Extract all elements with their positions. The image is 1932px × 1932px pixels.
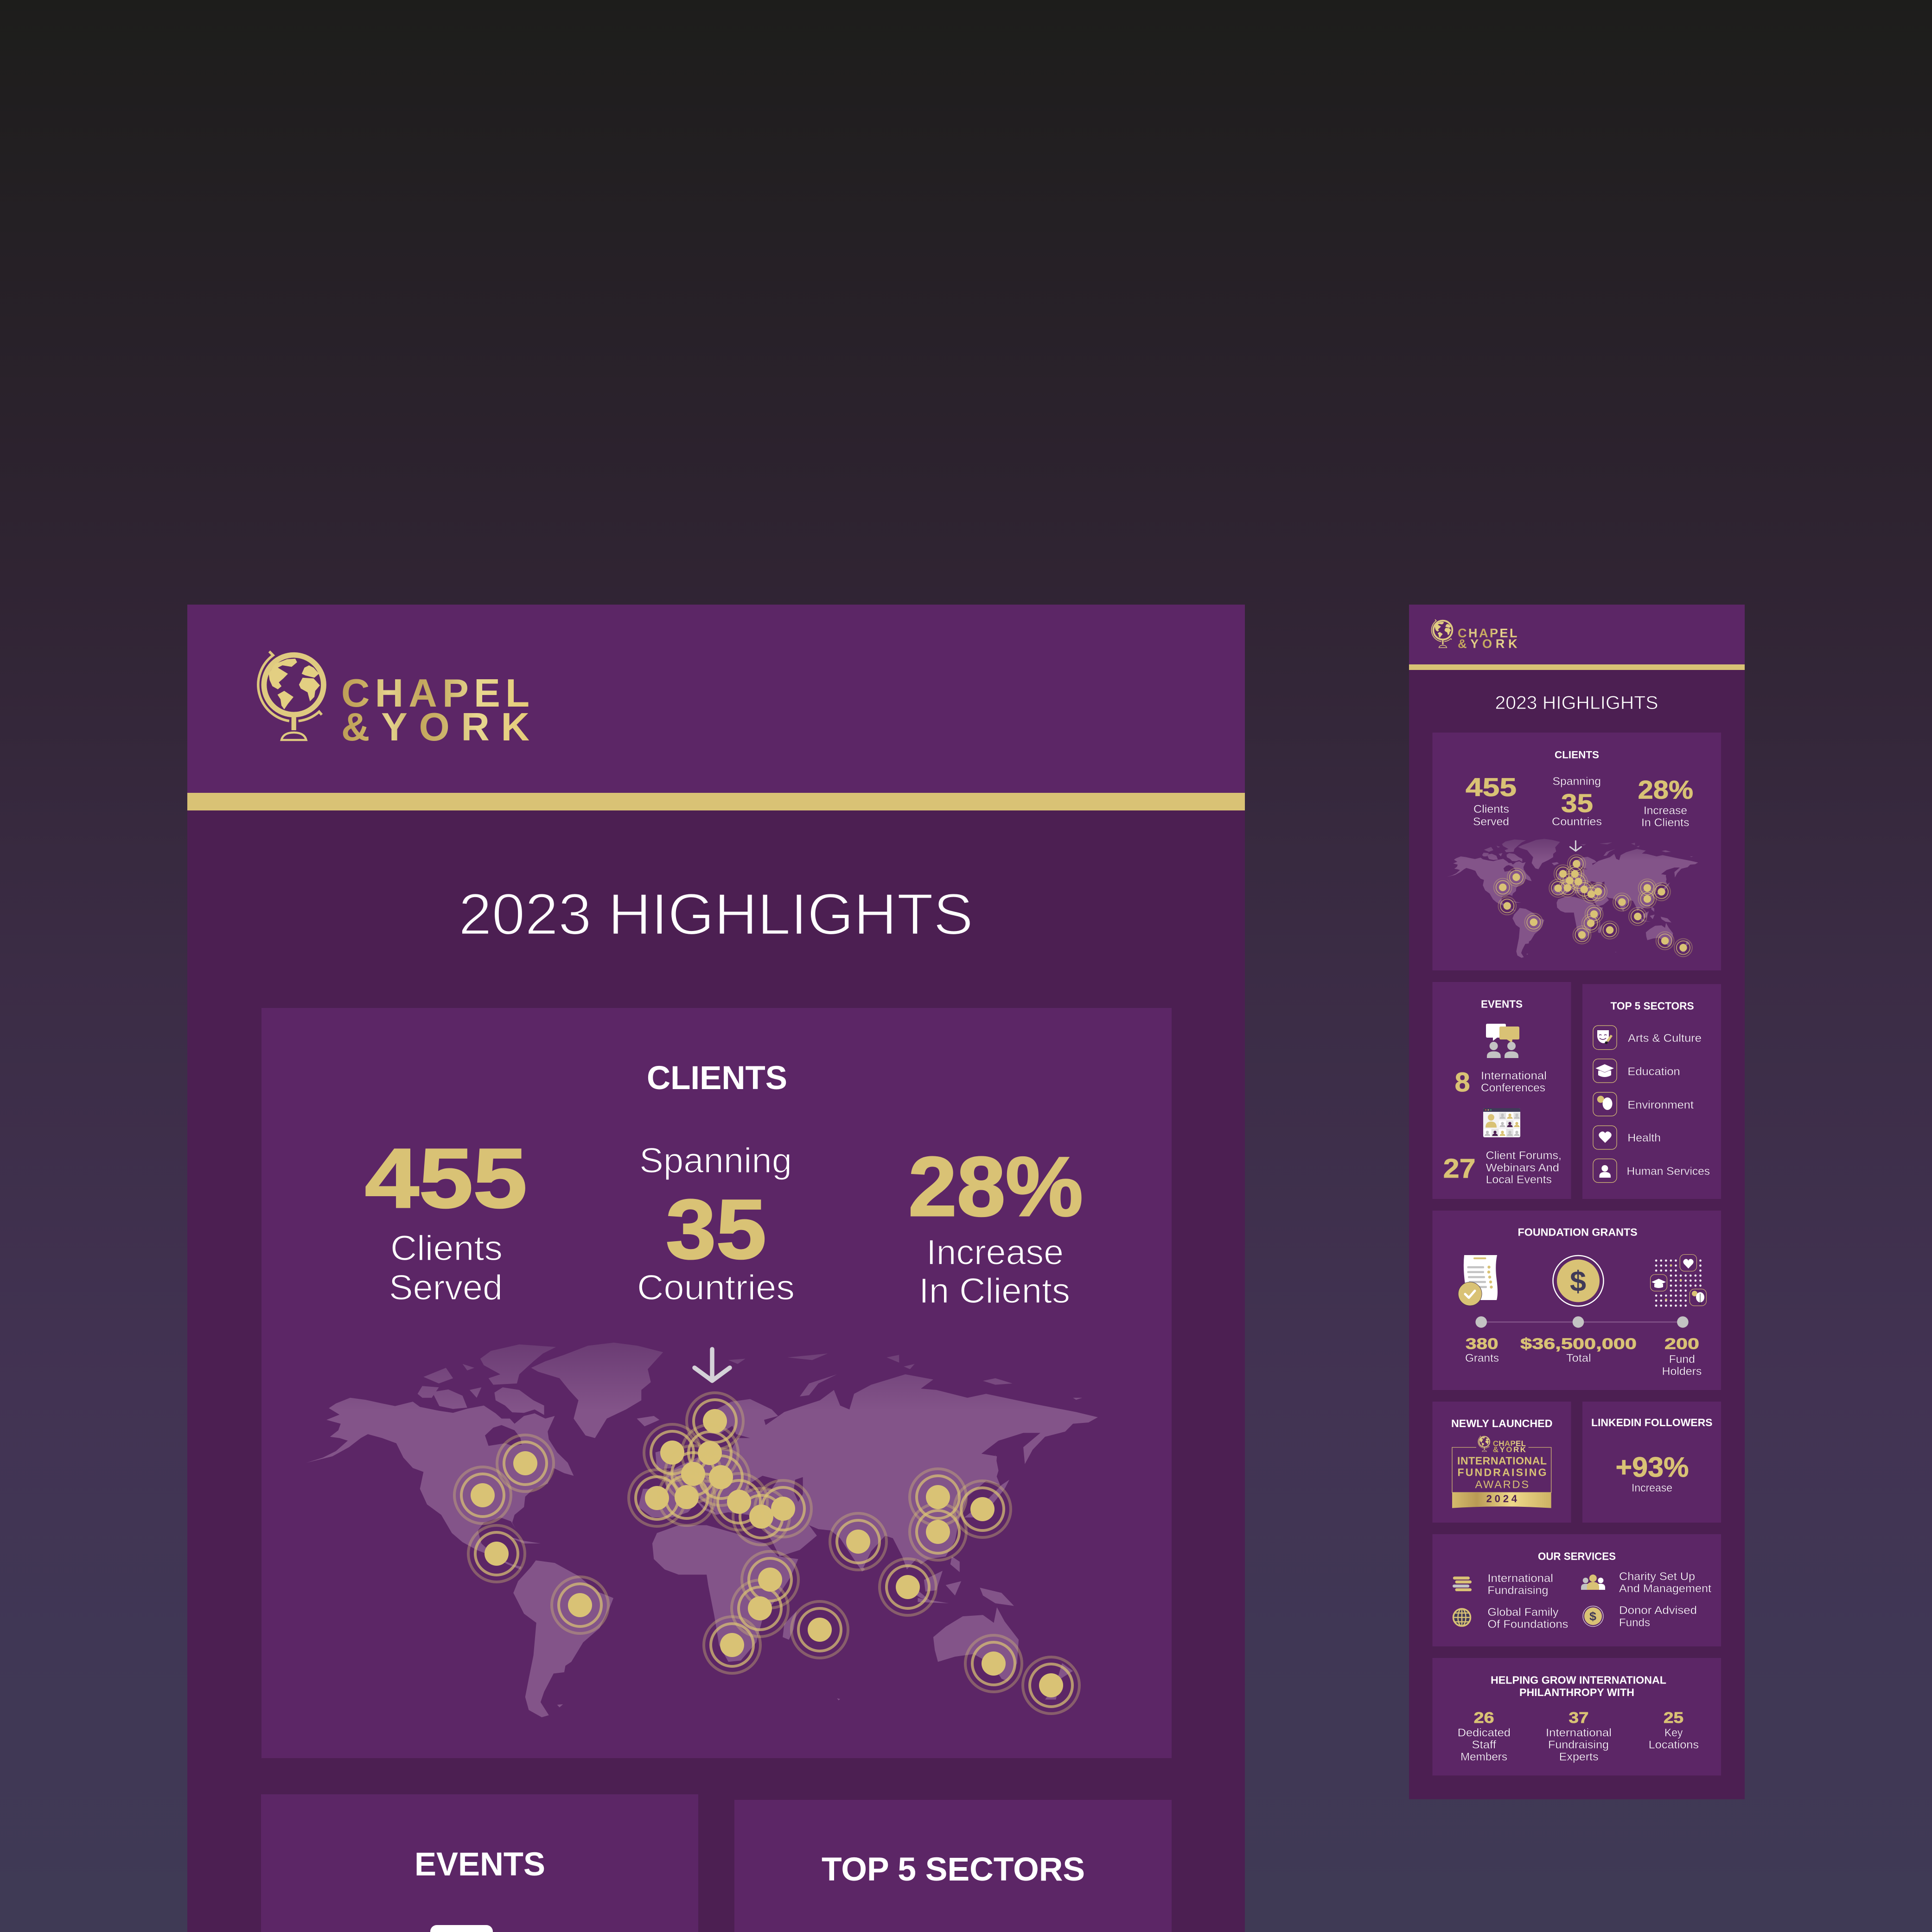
award badge [1452,1436,1551,1508]
stat: 37 experts [1546,1709,1612,1763]
world map with client locations [306,1343,1098,1717]
stat: 200 fund holders: 200 [1664,1335,1699,1352]
award badge: CHAPEL [1493,1439,1526,1448]
stat: 455 clients served: Clients [390,1229,503,1268]
stat 455 small: 455 [1466,772,1517,802]
stat: 26 staff: Dedicated [1458,1727,1511,1739]
small header band [1409,605,1745,664]
icon: conference speech bubbles and people [1486,1024,1519,1058]
stat 28% small [1638,775,1693,829]
stat: total amount: $36,500,000 [1520,1335,1637,1352]
map land: the Americas and Greenland [306,1343,663,1717]
header band [187,605,1245,793]
service: global family of foundations: Of Foundations [1487,1618,1568,1631]
panel: events small [1433,982,1571,1199]
stat: 28% increase in clients [908,1139,1083,1311]
events heading: EVENTS [414,1846,545,1883]
award badge: INTERNATIONAL [1457,1454,1547,1467]
service: global family of foundations [1453,1606,1568,1631]
service: charity set up and management: And Management [1619,1582,1711,1595]
panel: newly launched [1433,1402,1571,1523]
stat: 25 locations [1649,1709,1699,1751]
logo: Chapel & York: CHAPEL [341,671,529,715]
stat 35 small: 35 [1561,788,1593,818]
map land: Eurasia, Africa and Oceania [637,1353,1098,1700]
icon: speech bubble top [430,1925,493,1932]
stat: 37 experts: International [1546,1727,1612,1739]
philanthropy heading [1491,1674,1666,1698]
stat: 27 client forums: Local Events [1486,1173,1552,1186]
sector: education [1593,1059,1680,1083]
logo: Chapel & York: &YORK [341,705,529,749]
stat: 26 staff [1458,1709,1511,1763]
service: donor advised funds: Donor Advised [1619,1604,1697,1617]
philanthropy heading: PHILANTHROPY WITH [1519,1686,1634,1698]
service: international fundraising: Fundraising [1487,1584,1548,1597]
stat 28% small: 28% [1638,775,1693,804]
stat: 380 grants: Grants [1465,1352,1499,1365]
stat: 380 grants [1465,1335,1499,1365]
service: global family of foundations: Global Family [1487,1606,1558,1619]
gold divider bar [187,793,1245,810]
award badge: &YORK [1493,1445,1526,1454]
service: donor advised funds: Funds [1619,1616,1650,1629]
stat: 28% increase in clients: In Clients [919,1271,1070,1311]
icon: dollar coin [1553,1256,1603,1306]
stat: 200 fund holders [1662,1335,1702,1378]
stat: 380 grants: 380 [1466,1335,1498,1352]
world map small [1447,839,1698,958]
sector: health [1593,1126,1661,1149]
stat: 27 client forums: Client Forums, [1486,1149,1562,1162]
timeline connector with nodes [1475,1316,1689,1328]
stat: total amount: Total [1566,1352,1591,1365]
panel: foundation grants [1433,1211,1721,1390]
stat 35 small [1552,775,1602,828]
stat: 37 experts: Fundraising [1548,1739,1609,1751]
stat: 8 international conferences: International [1481,1070,1547,1082]
stat: 8 international conferences [1455,1067,1547,1097]
icon: dollar coin: $ [1570,1266,1586,1298]
stat: 455 clients served: 455 [365,1131,527,1225]
sector: environment: Environment [1627,1099,1694,1111]
stat: 27 client forums [1443,1149,1562,1186]
icon: dotted sectors cluster [1651,1255,1706,1308]
clients heading small: CLIENTS [1555,749,1599,760]
stat: 28% increase in clients: Increase [926,1233,1064,1272]
stat: 26 staff: Staff [1472,1739,1496,1751]
increase label: Increase [1632,1482,1672,1494]
small logo [1432,619,1518,651]
panel: our services [1433,1534,1721,1646]
stat: 25 locations: Locations [1649,1739,1699,1751]
stat: 37 experts: 37 [1569,1709,1588,1727]
stat 455 small [1466,772,1517,828]
panel: large infographic preview [187,605,1245,1932]
stat: 26 staff: Members [1460,1751,1507,1763]
small gold divider bar [1409,664,1745,670]
philanthropy heading: HELPING GROW INTERNATIONAL [1491,1674,1666,1686]
panel: helping grow international philanthropy [1433,1658,1721,1776]
stat: 200 fund holders: Holders [1662,1365,1702,1378]
linkedin heading: LINKEDIN FOLLOWERS [1591,1416,1713,1428]
title: 2023 HIGHLIGHTS [459,881,973,947]
sector: human services [1593,1159,1710,1182]
sector: arts & culture [1593,1026,1702,1050]
sector: health: Health [1627,1132,1661,1144]
panel: top 5 sectors small [1582,984,1721,1199]
stat: 8 international conferences: 8 [1455,1067,1470,1097]
location markers [454,1393,1079,1714]
services heading: OUR SERVICES [1538,1550,1616,1562]
panel: clients [261,1008,1172,1758]
service: charity set up and management: Charity Set Up [1619,1570,1695,1583]
clients heading: CLIENTS [647,1060,787,1097]
newly launched heading: NEWLY LAUNCHED [1451,1417,1552,1429]
award badge: FUNDRAISING [1458,1467,1547,1479]
stat: 200 fund holders: Fund [1669,1353,1695,1366]
stat 455 small: Clients [1473,803,1509,816]
sector: environment [1593,1092,1694,1116]
stat: 25 locations: 25 [1664,1709,1683,1727]
stat 28% small: In Clients [1641,816,1690,829]
foundation grants heading: FOUNDATION GRANTS [1518,1226,1638,1238]
small logo: CHAPEL [1458,626,1517,640]
sectors heading: TOP 5 SECTORS [822,1851,1085,1888]
stat: spanning 35 countries: Countries [637,1268,795,1307]
stat: 8 international conferences: Conferences [1481,1082,1545,1094]
sectors heading small: TOP 5 SECTORS [1611,1000,1694,1012]
stat 455 small: Served [1473,816,1509,828]
service: donor advised funds: $ [1589,1609,1597,1623]
panel: full infographic small preview [1409,605,1745,1799]
panel: linkedin followers [1582,1402,1721,1523]
stat: total amount [1520,1335,1637,1365]
stat: 28% increase in clients: 28% [908,1139,1083,1234]
stat 28% small: Increase [1644,804,1687,817]
sector: human services: Human Services [1626,1165,1710,1178]
service: charity set up and management [1581,1570,1711,1595]
panel: clients small [1433,733,1721,970]
stat: spanning 35 countries: Spanning [639,1141,792,1180]
service: international fundraising: International [1487,1572,1553,1585]
events heading small: EVENTS [1481,998,1523,1010]
stat: 26 staff: 26 [1474,1709,1494,1727]
stat: spanning 35 countries: 35 [666,1182,766,1276]
stat 35 small: Countries [1552,816,1602,828]
stat: 25 locations: Key [1664,1727,1683,1739]
icon: grant document with check [1458,1255,1498,1306]
panel: top 5 sectors (cropped) [734,1800,1172,1932]
stat: spanning 35 countries [637,1141,795,1307]
stat: 455 clients served [365,1131,527,1307]
sector: arts & culture: Arts & Culture [1628,1032,1702,1045]
arrow pointing down to the map [695,1349,730,1381]
stat 35 small: Spanning [1552,775,1601,788]
award badge: AWARDS [1475,1478,1529,1490]
stat: 37 experts: Experts [1559,1751,1599,1763]
service: international fundraising [1453,1572,1553,1597]
sector: education: Education [1627,1065,1680,1078]
stat: +93%: +93% [1615,1452,1689,1483]
icon: webinar window [1483,1108,1520,1137]
small logo: &YORK [1458,637,1518,651]
stat: 455 clients served: Served [389,1268,503,1307]
stat: 27 client forums: Webinars And [1486,1162,1559,1174]
stat: 27 client forums: 27 [1443,1154,1476,1184]
small title: 2023 HIGHLIGHTS [1495,693,1658,713]
service: donor advised funds [1583,1604,1697,1629]
award badge: 2024 [1486,1493,1518,1505]
logo: Chapel & York [258,651,529,749]
panel: events (cropped) [261,1794,698,1932]
